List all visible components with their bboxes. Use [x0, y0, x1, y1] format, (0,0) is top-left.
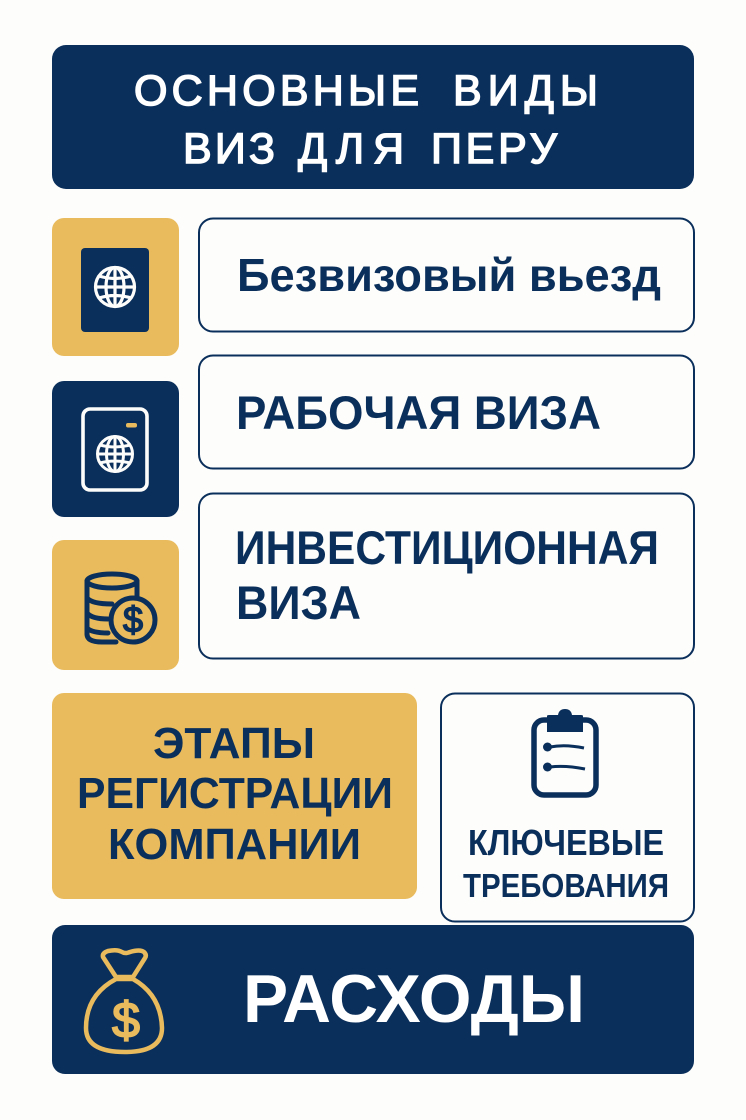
- panel: company registration steps: КОМПАНИИ: [108, 820, 361, 869]
- panel: work visa label: [199, 356, 694, 468]
- title text: ПЕРУ: [431, 125, 558, 173]
- requirements text: ТРЕБОВАНИЯ: [463, 867, 669, 904]
- title text: ВИДЫ: [453, 67, 598, 115]
- title text: ДЛЯ: [298, 125, 404, 173]
- panel: company registration steps: [52, 693, 417, 899]
- panel: visa-free entry label: [199, 218, 694, 332]
- icon: money bag: [86, 950, 162, 1052]
- panel: key requirements: [441, 694, 694, 922]
- panel: work visa icon: [52, 381, 179, 517]
- requirements text: КЛЮЧЕВЫЕ: [468, 822, 664, 863]
- title text: ОСНОВНЫЕ: [134, 67, 419, 115]
- panel: expenses: [52, 925, 694, 1074]
- panel: work visa label: РАБОЧАЯ ВИЗА: [236, 386, 601, 439]
- panel: investment visa label: ИНВЕСТИЦИОННАЯ: [235, 521, 659, 574]
- requirements text: [463, 822, 669, 904]
- panel: investment visa label: ВИЗА: [236, 576, 361, 629]
- panel: company registration steps: ЭТАПЫ: [153, 719, 315, 768]
- panel: investment visa icon: $: [123, 599, 143, 640]
- title text: [134, 67, 598, 173]
- panel: visa-free entry icon: [52, 218, 179, 356]
- title text: ВИЗ: [183, 125, 275, 173]
- icon: clipboard: [534, 709, 596, 795]
- panel: investment visa label: [199, 494, 694, 658]
- expenses text: РАСХОДЫ: [243, 961, 585, 1037]
- panel: expenses: $: [112, 992, 140, 1048]
- panel: visa-free entry label: Безвизовый вьезд: [237, 249, 661, 301]
- panel: company registration steps: РЕГИСТРАЦИИ: [77, 769, 393, 818]
- panel: investment visa icon: [52, 540, 179, 670]
- title banner: [52, 45, 694, 189]
